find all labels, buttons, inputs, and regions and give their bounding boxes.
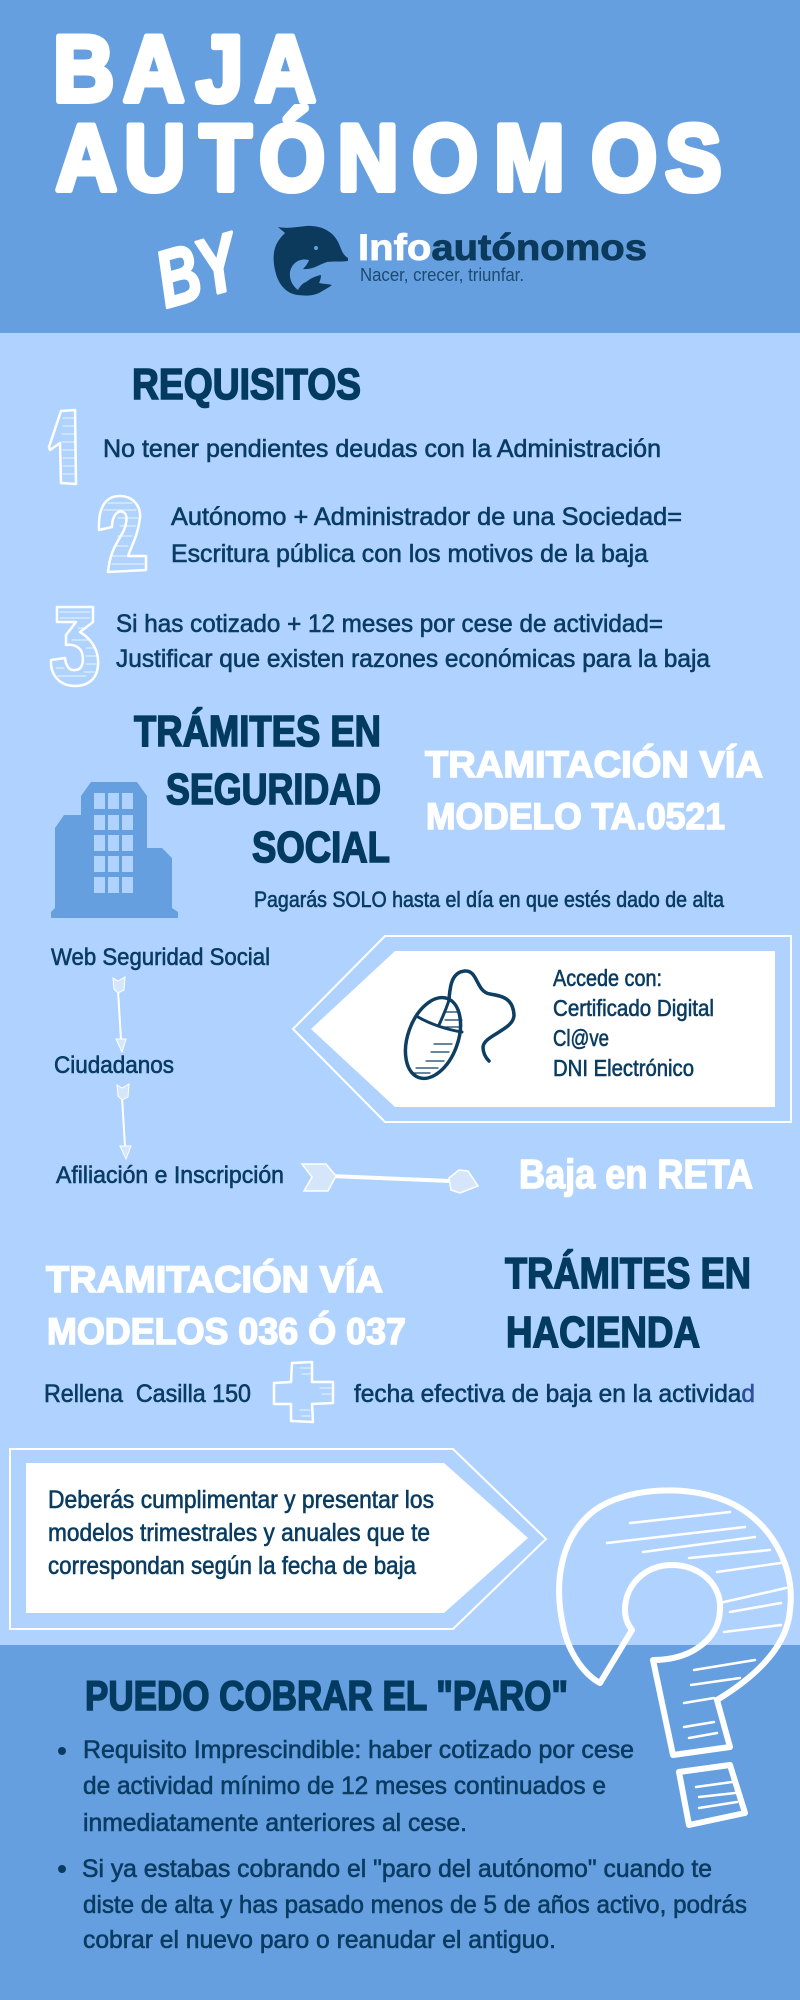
title <box>53 16 722 210</box>
callout text: Certificado Digital <box>553 995 714 1021</box>
bullet 1 <box>58 1736 634 1837</box>
requisito 3 text <box>116 610 710 673</box>
heading: trámites en hacienda: TRÁMITES EN <box>505 1248 751 1298</box>
heading: trámites en hacienda: HACIENDA <box>506 1308 700 1357</box>
callout: deberás cumplimentar <box>10 1449 546 1629</box>
icon: number 2 <box>99 496 146 572</box>
heading: trámites en seguridad social: TRÁMITES EN <box>134 706 381 756</box>
panel: header <box>0 0 800 333</box>
heading: requisitos: REQUISITOS <box>132 360 361 409</box>
heading: puedo cobrar el paro: PUEDO COBRAR EL "PARO" <box>85 1672 568 1719</box>
requisito 1 text: No tener pendientes deudas con la Administración <box>103 435 661 463</box>
icon: dolphin <box>274 226 348 296</box>
bullet 1: de actividad mínimo de 12 meses continuados e <box>83 1772 606 1800</box>
callout text: DNI Electrónico <box>553 1055 694 1081</box>
bullet 2: diste de alta y has pasado menos de 5 de años activo, podrás <box>83 1891 747 1919</box>
icon: mouse <box>395 971 514 1086</box>
subheading: tramitación vía modelo TA.0521 <box>425 743 763 837</box>
step: afiliación e inscripción: Afiliación e Inscripción <box>56 1162 284 1189</box>
callout text: Cl@ve <box>553 1025 609 1051</box>
title: BAJA <box>53 16 316 121</box>
arrow: down 1 <box>113 977 126 1052</box>
label: baja en reta: Baja en RETA <box>519 1151 753 1197</box>
panel: paro <box>0 1645 800 2000</box>
heading: trámites en seguridad social: SOCIAL <box>252 823 390 872</box>
arrow: down 2 <box>117 1084 131 1159</box>
panel: requisitos <box>49 360 710 686</box>
subheading: tramitación vía modelo TA.0521: TRAMITACIÓN VÍA <box>425 743 763 785</box>
icon: question mark <box>559 1490 791 1825</box>
title: AUTÓNOMOS <box>56 105 722 210</box>
panel: seguridad social <box>51 706 791 1197</box>
heading: trámites en seguridad social <box>134 706 390 872</box>
heading: trámites en seguridad social: SEGURIDAD <box>166 765 381 814</box>
bullet 2: Si ya estabas cobrando el "paro del autónomo" cuando te <box>82 1855 712 1883</box>
requisito 2 text: Escritura pública con los motivos de la baja <box>171 540 648 568</box>
requisito 3 text: Justificar que existen razones económicas para la baja <box>116 645 710 673</box>
callout text: modelos trimestrales y anuales que te <box>48 1519 430 1547</box>
requisito 2 text: Autónomo + Administrador de una Sociedad= <box>171 503 682 531</box>
heading: trámites en hacienda <box>505 1248 751 1357</box>
text: fecha efectiva: fecha efectiva de baja en la actividad <box>354 1380 755 1408</box>
logo tagline: Nacer, crecer, triunfar. <box>360 265 524 285</box>
subheading: tramitación vía modelos 036 ó 037: MODELOS 036 Ó 037 <box>47 1310 406 1352</box>
subheading: tramitación vía modelos 036 ó 037 <box>46 1258 406 1352</box>
bullet 2: cobrar el nuevo paro o reanudar el antiguo. <box>83 1926 556 1954</box>
bullet 1: Requisito Imprescindible: haber cotizado por cese <box>83 1736 634 1764</box>
arrow: right <box>302 1164 478 1193</box>
icon: number 1 <box>49 410 76 484</box>
note: pagarás solo: Pagarás SOLO hasta el día en que estés dado de alta <box>254 887 725 912</box>
bullet 2 <box>58 1855 747 1954</box>
subheading: tramitación vía modelos 036 ó 037: TRAMITACIÓN VÍA <box>46 1258 383 1300</box>
callout text: Accede con: <box>553 965 662 991</box>
logo: Infoautónomos <box>274 226 647 296</box>
callout text: Deberás cumplimentar y presentar los <box>48 1486 434 1514</box>
step: web seguridad social: Web Seguridad Social <box>51 944 270 971</box>
icon: plus <box>274 1362 333 1422</box>
requisito 3 text: Si has cotizado + 12 meses por cese de actividad= <box>116 610 663 638</box>
callout text <box>553 965 714 1081</box>
icon: number 3 <box>51 607 98 686</box>
step: ciudadanos: Ciudadanos <box>54 1052 174 1079</box>
callout: accede con <box>293 936 791 1122</box>
icon: building <box>51 782 178 918</box>
requisito 2 text <box>171 503 682 568</box>
callout text: correspondan según la fecha de baja <box>48 1552 416 1580</box>
by label: BY <box>146 215 252 325</box>
logo wordmark: Infoautónomos <box>358 227 647 268</box>
subheading: tramitación vía modelo TA.0521: MODELO TA.0521 <box>426 796 725 837</box>
panel: hacienda <box>10 1248 755 1629</box>
text: rellena casilla 150: Rellena Casilla 150 <box>44 1380 251 1408</box>
callout text <box>48 1486 434 1580</box>
bullet 1: inmediatamente anteriores al cese. <box>83 1809 467 1837</box>
